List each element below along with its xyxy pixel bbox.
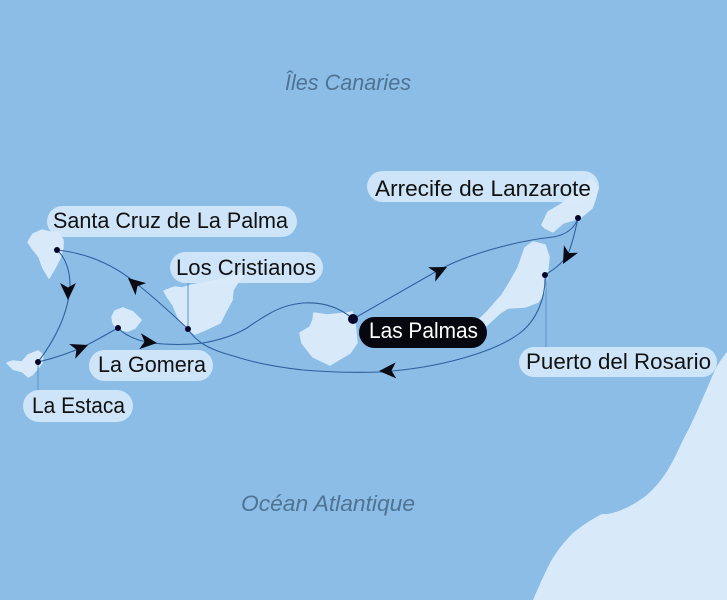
mainland coast xyxy=(533,352,727,600)
direction arrows xyxy=(60,245,578,379)
marker: Las Palmas xyxy=(348,314,358,324)
leader: La Estaca xyxy=(37,362,39,392)
leader: Los Cristianos xyxy=(187,280,189,329)
arrow 4 xyxy=(123,272,146,295)
label: Las Palmas: Las Palmas xyxy=(369,318,478,343)
route: La Gomera to Las Palmas xyxy=(118,303,353,344)
island: Fuerteventura xyxy=(472,242,549,332)
label: Arrecife de Lanzarote: Arrecife de Lanzarote xyxy=(375,176,591,201)
marker: Puerto del Rosario xyxy=(542,272,548,278)
label: La Estaca: La Estaca xyxy=(32,393,126,418)
marker: La Gomera xyxy=(115,325,121,331)
marker: Los Cristianos xyxy=(185,326,191,332)
route: Las Palmas to Arrecife xyxy=(353,218,578,319)
route: Santa Cruz to La Estaca xyxy=(38,250,70,362)
island: Gran Canaria xyxy=(300,312,357,365)
route: La Estaca to La Gomera xyxy=(38,328,118,362)
leader lines xyxy=(38,275,546,392)
label: Santa Cruz de La Palma: Santa Cruz de La Palma xyxy=(53,208,289,233)
title: Océan Atlantique: Océan Atlantique xyxy=(241,491,415,516)
label: La Estaca xyxy=(23,390,133,422)
arrow 3 xyxy=(379,362,396,379)
port markers xyxy=(35,215,581,365)
route: Puerto del Rosario to Los Cristianos xyxy=(188,275,545,372)
arrow 7 xyxy=(139,333,158,351)
island: Tenerife xyxy=(164,272,247,334)
marker: Arrecife xyxy=(575,215,581,221)
marker: Santa Cruz xyxy=(54,247,60,253)
island: La Gomera xyxy=(112,308,141,331)
island: Lanzarote xyxy=(542,178,598,232)
route lines xyxy=(38,218,578,372)
label: Los Cristianos: Los Cristianos xyxy=(176,255,316,280)
title: Îles Canaries: Îles Canaries xyxy=(285,70,411,95)
arrow 5 xyxy=(60,283,76,300)
island: El Hierro xyxy=(7,351,43,377)
arrow 2 xyxy=(556,245,578,268)
marker: La Estaca xyxy=(35,359,41,365)
route: Los Cristianos to Santa Cruz xyxy=(57,250,188,329)
label: Puerto del Rosario: Puerto del Rosario xyxy=(526,349,711,374)
route: Arrecife to Puerto del Rosario xyxy=(545,218,578,275)
arrow 1 xyxy=(428,260,451,282)
arrow 6 xyxy=(69,338,91,359)
label: La Gomera: La Gomera xyxy=(98,352,207,377)
island: La Palma xyxy=(28,230,63,278)
islands xyxy=(7,178,598,377)
leader: Puerto del Rosario xyxy=(545,275,547,348)
